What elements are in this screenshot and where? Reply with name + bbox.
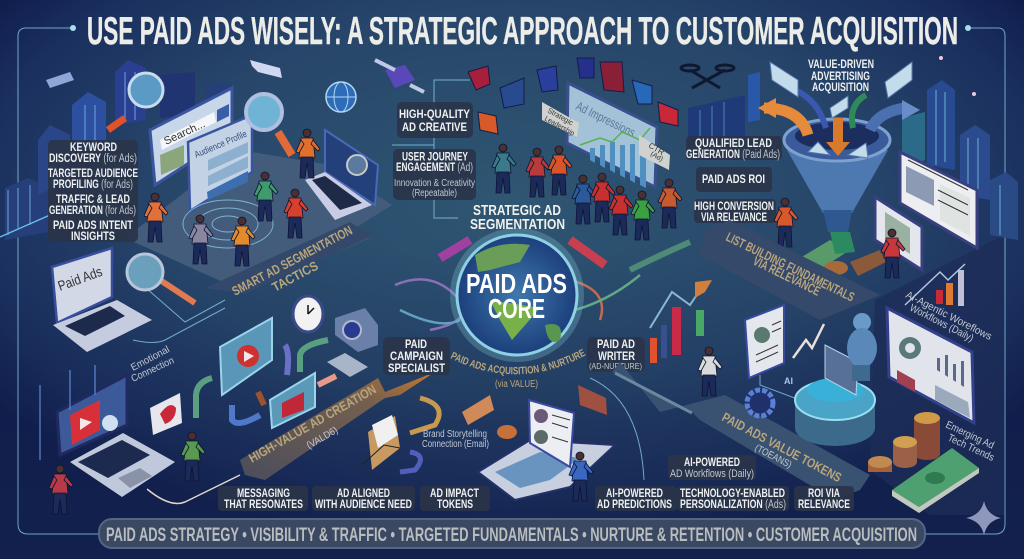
text block: impact tokens: TOKENS [437,499,473,511]
arrow band: list building [700,220,880,320]
text block: left list: GENERATION (for Ads) [49,205,136,217]
icon: ai pedestal [795,345,875,446]
sign: strategic leadership: Leadership [543,114,576,138]
people: board team [492,144,682,240]
laptop: paid ads upper [52,248,152,352]
text block: value driven [808,59,874,94]
text block: high conversion [694,199,776,224]
icon: right city [902,56,1018,240]
bar chart: growth [650,290,704,363]
connector lines center top [392,80,470,218]
heading: smart ad segmentation tactics [229,222,355,299]
heading: list building [724,229,857,305]
text block: roi [696,167,772,192]
text block: ai powered workflows: AI-POWERED [684,457,740,469]
text block: high conversion: VIA RELEVANCE [701,212,767,224]
darker lower right ground [870,235,1004,515]
text block: value driven: VALUE-DRIVEN [808,59,874,71]
heading: list building: LIST BUILDING FUNDAMENTALS [724,229,857,305]
laptop: paid ads upper: Paid Ads [56,263,104,294]
text block: messaging [218,486,308,511]
band: tokens [612,362,870,500]
lower ground shade [0,250,1024,559]
icon: drone left [46,72,74,88]
arrows: workflow [196,340,336,423]
heading: value tokens: (TOEANS) [753,443,793,471]
text: ai tag: AI [784,376,793,386]
text block: qualified lead: GENERATION (Paid Ads) [686,149,780,161]
heading: agentic workflows: Workflows (Daily) [908,302,975,344]
icon: funnel money [800,232,886,276]
icon: magnifier one [108,73,163,130]
icon: plane [250,60,282,78]
text block: user journey: Innovation & Creativity [394,178,475,189]
text block: high quality creative: AD CREATIVE [402,122,467,134]
heading: curved acquisition and nurture: PAID ADS ACQUISITION & NURTURE [450,348,586,376]
text block: left list [48,140,138,243]
label: paid ad writer [587,337,645,372]
document: report [745,305,784,378]
text block: roi via relevance [794,486,854,511]
icon: small envelope [462,395,494,425]
icon: funnel [784,119,890,232]
icon: rings [183,200,273,248]
text block: value driven: ADVERTISING [811,71,870,83]
text block: high conversion: HIGH CONVERSION [694,201,774,213]
icon: robot [847,313,877,381]
label: paid ad writer: (AD-NURTURE) [589,361,642,371]
text block: impact tokens [420,486,490,511]
text block: left list: TRAFFIC & LEAD [56,194,130,206]
sign: ctr: (Ad) [649,151,664,163]
icon: satellite [375,60,424,92]
text block: aligned [312,486,415,511]
panel: ad impressions board [567,83,657,188]
globe core: CORE [488,293,545,324]
heading: emotional connection: Emotional [129,344,171,374]
panel: right screens [875,152,977,270]
text block: brand storytelling [422,429,489,450]
panel: middle city [688,72,760,146]
heading: emotional connection: Connection [130,355,176,385]
text block: high quality creative: HIGH-QUALITY [399,109,470,121]
text block: aligned: AD ALIGNED [337,488,390,500]
text block: qualified lead [686,136,782,161]
panel: left city [0,60,232,240]
bar chart: top right small [905,264,965,306]
text block: left list: DISCOVERY (for Ads) [49,153,137,165]
sign: strategic leadership: Strategic [546,106,575,127]
icon: small speech token [497,425,517,439]
icon: gear [747,390,773,416]
person: funnel [774,198,798,247]
panel: smart ad band [205,222,372,294]
icon: coins [868,412,940,472]
panel: ad impressions board: Ad Impressions [574,99,637,140]
text block: user journey: USER JOURNEY [402,152,468,164]
icon: cash stack [892,448,979,513]
icon: magnifier three [127,254,195,303]
text block: ai powered workflows: AD Workflows (Daily) [670,468,754,480]
person: chart [698,347,722,396]
icon: envelopes [770,62,912,158]
sign: ctr: CTR [647,141,666,157]
connector: core to list [630,242,690,270]
text block: messaging: MESSAGING [237,488,290,500]
text block: roi: PAID ADS ROI [702,174,765,186]
panel: audience profile window: Audience Profile [193,129,249,161]
band: high value ad creation [240,372,435,480]
heading: curved acquisition and nurture: (via VALUE) [495,379,538,390]
icon: small ad card [695,280,712,298]
heading: emerging trends: Tech Trends [946,432,996,464]
icon: open envelope [362,415,400,470]
text block: predictions [595,486,677,511]
text block: roi via relevance: RELEVANCE [798,499,850,511]
globe core: PAID ADS [466,268,567,299]
heading: curved acquisition and nurture [450,348,586,390]
heading: strategic ad segmentation: STRATEGIC AD [473,202,561,219]
label: paid campaign specialist: SPECIALIST [388,363,445,375]
person: laptop [49,465,73,514]
person: green [181,432,205,481]
connector: tokens road [615,373,692,413]
text block: personalization: PERSONALIZATION (Ads) [680,499,786,511]
text block: left list: KEYWORD [70,142,117,154]
text block: personalization [677,486,789,511]
text block: qualified lead: QUALIFIED LEAD [695,138,772,150]
text block: ai powered workflows [668,455,756,480]
person: tablet [569,452,593,501]
text block: left list: PROFILING (for Ads) [53,179,133,191]
icon: sparkle [966,501,1001,535]
connector: bottom left [147,475,240,503]
heading: emerging trends: Emerging Ad [944,419,996,452]
icon: heart bubble [150,393,182,435]
text block: high quality creative [397,102,473,138]
icon: floating ad card [578,385,607,415]
sign: strategic leadership [542,102,579,138]
text block: predictions: AI-POWERED [606,488,663,500]
tangled connectors around core [395,240,640,330]
text block: value driven: ACQUISITION [812,82,869,94]
text block: personalization: TECHNOLOGY-ENABLED [680,488,785,500]
person: right screens [881,229,905,278]
text block: aligned: WITH AUDIENCE NEED [315,499,412,511]
label: paid campaign specialist: CAMPAIGN [390,351,443,363]
icon: curved arrows [400,398,439,472]
panel: search window: Search... [162,118,207,148]
text block: predictions: AD PREDICTIONS [597,499,672,511]
text block: brand storytelling: Connection (Email) [422,439,489,450]
connector lines left [133,288,225,342]
heading: smart ad segmentation tactics: SMART AD SEGMENTATION [229,222,355,299]
text block: left list: INSIGHTS [71,231,115,243]
panel: audience profile window [188,115,252,211]
panel: upper left platform [125,150,392,292]
heading: smart ad segmentation tactics: TACTICS [269,258,321,295]
label: paid campaign specialist [383,337,450,375]
text block: left list: TARGETED AUDIENCE [48,168,138,180]
text block: brand storytelling: Brand Storytelling [423,429,487,440]
label: paid ad writer: WRITER [598,351,636,363]
panel: video player one [220,318,272,395]
heading: value tokens: PAID ADS VALUE TOKENS [720,409,844,485]
people: upper left [144,129,320,266]
connector lines lower center [590,375,800,480]
text block: messaging: THAT RESONATES [224,499,303,511]
icon: laptop upper [305,130,378,220]
panel: search window [150,88,232,185]
heading: agentic workflows: AI-Agentic Woreflows [904,289,994,343]
panel: dashboard screen [887,308,974,423]
footer bar [99,519,925,548]
text block: roi via relevance: ROI VIA [808,488,840,500]
globe core [450,228,584,362]
text block: user journey: ENGAGEMENT (Ad) [396,162,473,174]
heading: value tokens [720,409,844,485]
icon: photo card [327,353,368,377]
icon: funnel arrows [758,90,920,156]
icon: camera [335,308,378,352]
social icons [468,58,678,134]
heading: strategic ad segmentation: SEGMENTATION [470,216,565,233]
heading: list building: VIA RELEVANCE [751,253,823,299]
icon: small globe [326,82,356,112]
heading: high value ad creation: HIGH-VALUE AD CREATION [246,381,379,466]
icon: trend arrow [793,324,824,358]
icon: clock [293,296,323,332]
text block: user journey [393,149,476,200]
text block: left list: PAID ADS INTENT [53,220,133,232]
heading: high value ad creation: (VALD6) [305,425,340,452]
icon: drone [681,65,734,88]
label: paid campaign specialist: PAID [405,339,427,351]
laptop: video lower left [40,365,175,497]
tablet: lower center [478,400,615,500]
icon: magnifier two [246,94,292,155]
text block: impact tokens: AD IMPACT [430,488,479,500]
label: paid ad writer: PAID AD [597,339,635,351]
panel: video player two [270,373,315,428]
heading: strategic ad segmentation [470,202,565,233]
text block: user journey: (Repeatable) [412,188,457,199]
sign: ctr [639,135,670,170]
